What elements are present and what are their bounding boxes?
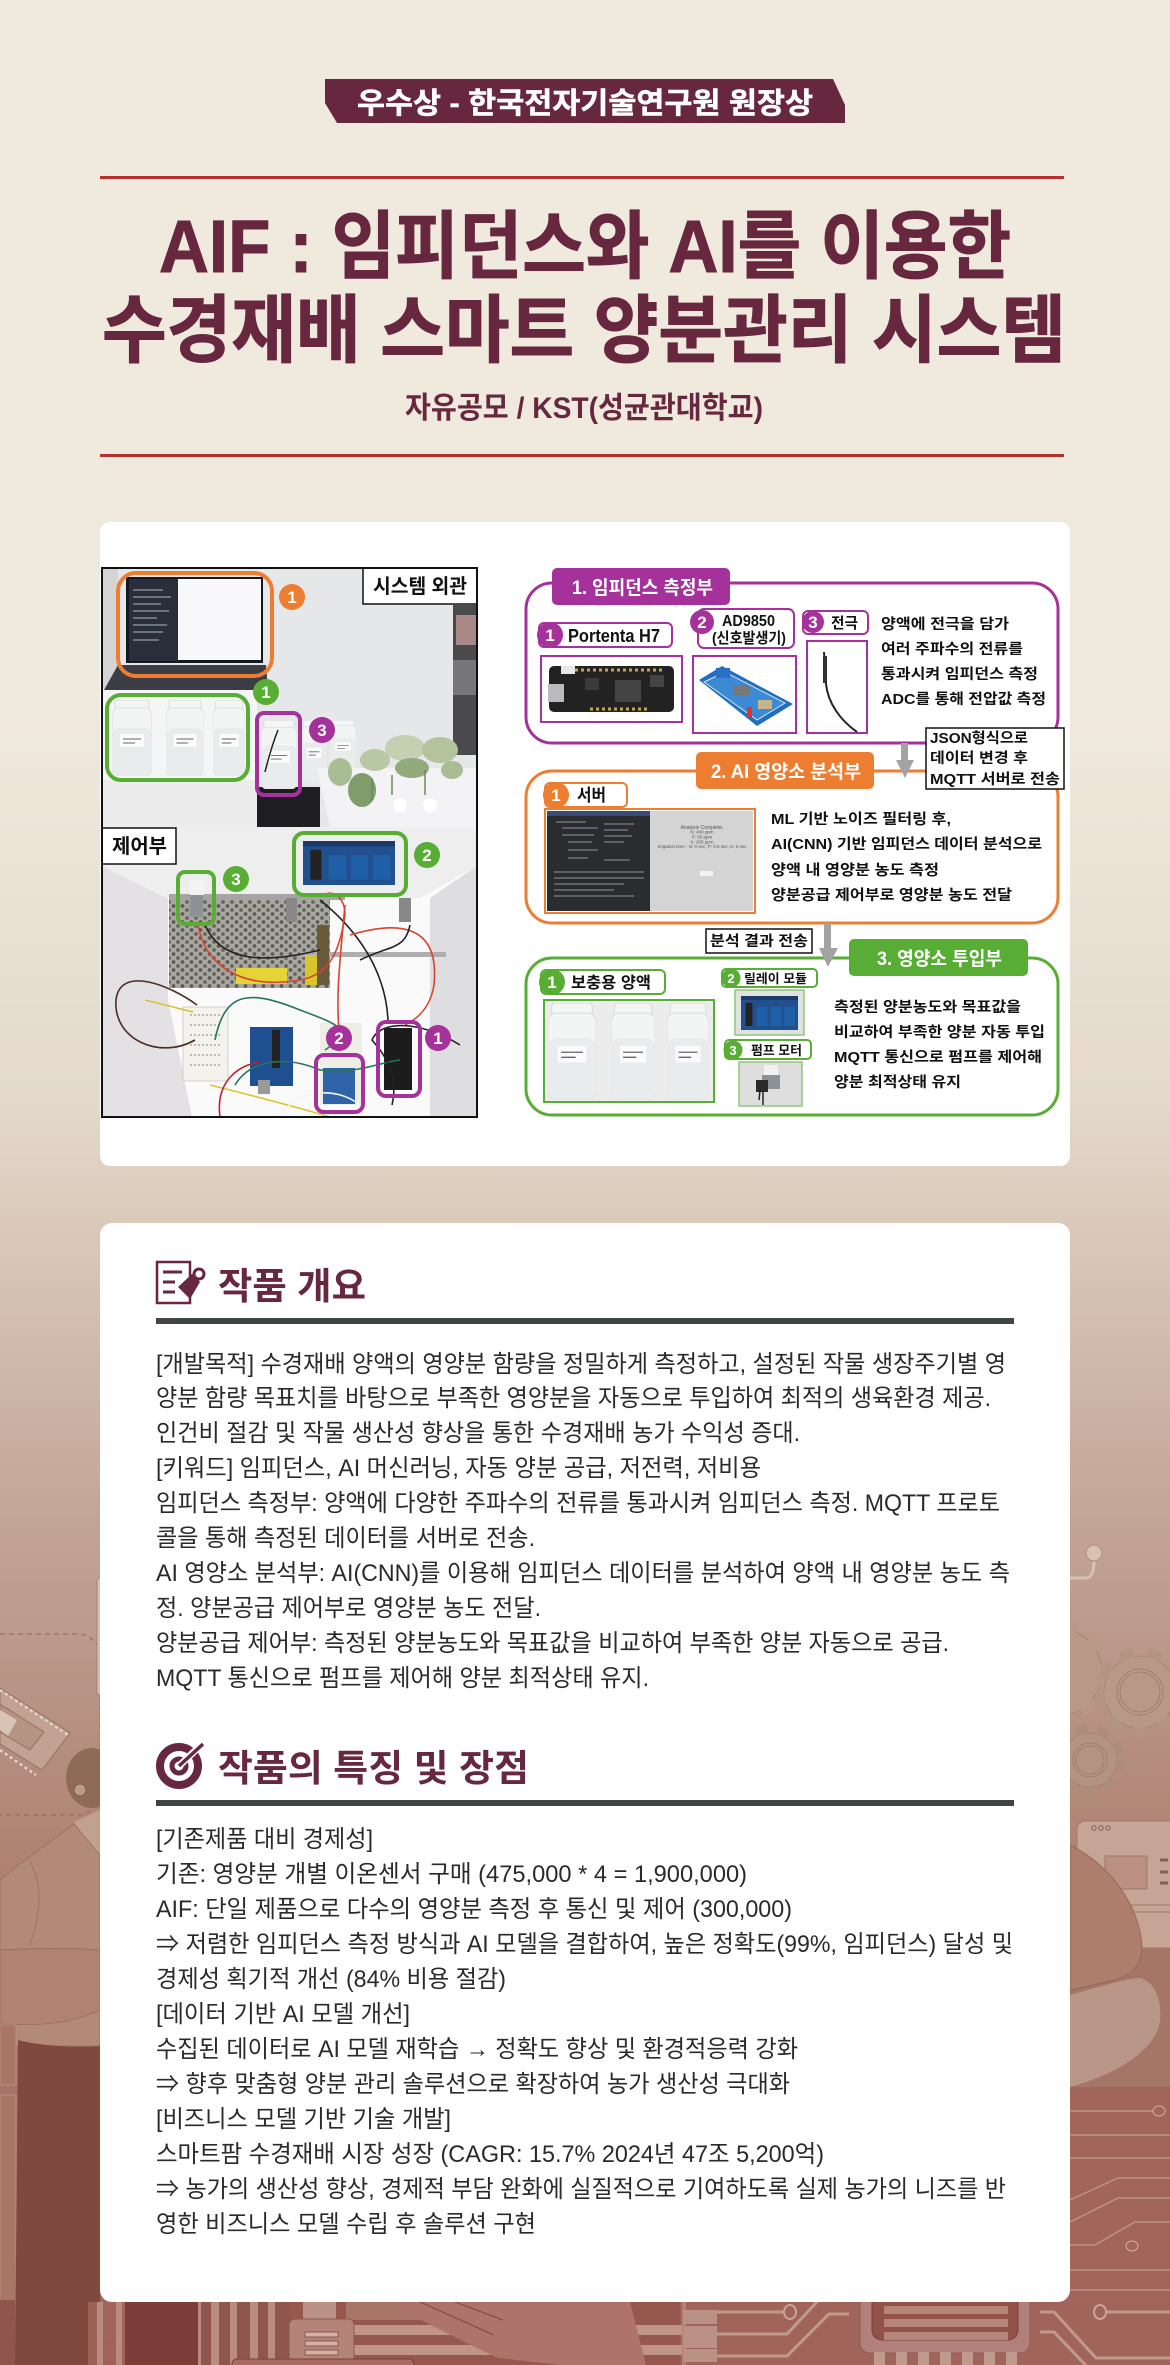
main title: 수경재배 스마트 양분관리 시스템 xyxy=(102,289,1066,372)
heading: impedance measurement: 1. 임피던스 측정부 xyxy=(572,577,713,599)
item: Portenta H7: Portenta H7 xyxy=(568,626,660,646)
item: Portenta H7: 1 xyxy=(545,626,555,645)
callout: JSON MQTT transfer: JSON형식으로 xyxy=(930,730,1028,747)
image: server screenshot: Analysis Complete. xyxy=(681,825,723,831)
item: AD9850: AD9850 xyxy=(722,613,775,630)
item: AD9850: (신호발생기) xyxy=(712,630,786,647)
text: features body: AIF: 단일 제품으로 다수의 영양분 측정 후 통신 및 제어 (300,000) xyxy=(156,1896,792,1923)
heading: impedance measurement xyxy=(552,568,730,605)
photo: system exterior: 1 xyxy=(287,588,297,607)
photo: control unit: 2 xyxy=(334,1029,344,1048)
item: server xyxy=(543,782,627,808)
text: impedance description xyxy=(881,616,1046,708)
item: relay module: 2 xyxy=(727,971,735,986)
text: overview body: [개발목적] 수경재배 양액의 영양분 함량을 정밀하게 측정하고, 설정된 작물 생장주기별 영 xyxy=(156,1351,1006,1378)
panel: 2. AI nutrient analysis xyxy=(526,752,1058,923)
text: analysis description xyxy=(771,811,1042,904)
callout: JSON MQTT transfer: MQTT 서버로 전송 xyxy=(930,771,1060,788)
item: pump motor: 3 xyxy=(729,1043,737,1058)
subtitle: organisation: 자유공모 / KST(성균관대학교) xyxy=(405,392,763,425)
image: server screenshot: P: 50 ppm xyxy=(692,834,713,840)
item: Portenta H7 xyxy=(537,622,682,722)
item: supplemental solution: 1 xyxy=(547,973,557,992)
photo: control unit: 1 xyxy=(433,1029,443,1048)
heading: project overview: 작품 개요 xyxy=(218,1266,366,1307)
text: overview body: 양분공급 제어부: 측정된 양분농도와 목표값을 비교하여 부족한 양분 자동으로 공급. xyxy=(156,1630,949,1657)
label: system exterior xyxy=(363,568,477,604)
panel: system diagram card xyxy=(100,522,1070,1166)
heading: nutrient injection: 3. 영양소 투입부 xyxy=(877,948,1002,970)
text: impedance description: 통과시켜 임피던스 측정 xyxy=(881,666,1038,683)
item: electrode: 전극 xyxy=(831,615,858,632)
image: server screenshot: Irrigation time - N: 0 sec, P: 0.5 sec, K: 0 sec xyxy=(657,844,747,849)
item: relay module xyxy=(722,968,817,1035)
item: server: 1 xyxy=(551,786,561,805)
text: injection description: MQTT 통신으로 펌프를 제어해 xyxy=(834,1049,1042,1066)
photo: system exterior: 3 xyxy=(317,721,327,740)
heading: AI nutrient analysis: 2. AI 영양소 분석부 xyxy=(711,761,861,783)
text: overview body: [키워드] 임피던스, AI 머신러닝, 자동 양분 공급, 저전력, 저비용 xyxy=(156,1455,761,1482)
callout: JSON MQTT transfer: 데이터 변경 후 xyxy=(930,750,1028,767)
text: features body: 영한 비즈니스 모델 수립 후 솔루션 구현 xyxy=(156,2211,536,2238)
heading: AI nutrient analysis xyxy=(696,752,874,789)
text: injection description: 비교하여 부족한 양분 자동 투입 xyxy=(834,1024,1045,1041)
arrow: analysis to injection xyxy=(819,923,838,967)
photo: control unit: 3 xyxy=(231,870,241,889)
main title: AIF : 임피던스와 AI를 이용한 xyxy=(159,205,1011,288)
label: system exterior: 시스템 외관 xyxy=(373,575,467,598)
photo: system exterior: 1 xyxy=(261,683,271,702)
right illustration: node, gears, browser window, arm and traces xyxy=(1011,1545,1170,2302)
callout: JSON MQTT transfer xyxy=(926,728,1064,789)
bottom right illustration: circuit chip and traces xyxy=(682,2289,1170,2365)
section: project overview xyxy=(156,1262,1014,1692)
text: features body: 기존: 영양분 개별 이온센서 구매 (475,000 * 4 = 1,900,000) xyxy=(156,1861,747,1888)
icon: target xyxy=(160,1744,203,1785)
item: relay module: 릴레이 모듈 xyxy=(744,971,807,986)
text: features body: ⇒ 농가의 생산성 향상, 경제적 부담 완화에 실질적으로 기여하도록 실제 농가의 니즈를 반 xyxy=(156,2176,1006,2203)
item: supplemental solution: 보충용 양액 xyxy=(571,974,651,992)
text: injection description: 양분 최적상태 유지 xyxy=(834,1074,961,1091)
text: features body: [비즈니스 모델 기반 기술 개발] xyxy=(156,2106,451,2133)
section: features and advantages xyxy=(156,1744,1014,2238)
text: features body xyxy=(156,1826,1013,2238)
callout: analysis result transfer xyxy=(706,929,812,953)
label: control unit xyxy=(102,828,176,864)
image: server screenshot: N: 400 ppm xyxy=(690,830,714,834)
icon: document with pin xyxy=(157,1262,204,1303)
arrow: measurement to analysis xyxy=(896,743,914,778)
text: overview body: MQTT 통신으로 펌프를 제어해 양분 최적상태 유지. xyxy=(156,1665,649,1692)
left illustration: dashed frame, film chip, person xyxy=(0,1578,122,2365)
callout: analysis result transfer: 분석 결과 전송 xyxy=(710,933,808,950)
text: features body: 수집된 데이터로 AI 모델 재학습 → 정확도 향상 및 환경적응력 강화 xyxy=(156,2036,798,2063)
text: overview body: 정. 양분공급 제어부로 영양분 농도 전달. xyxy=(156,1595,541,1622)
label: control unit: 제어부 xyxy=(112,835,167,858)
text: features body: 경제성 획기적 개선 (84% 비용 절감) xyxy=(156,1966,506,1993)
text: features body: [데이터 기반 AI 모델 개선] xyxy=(156,2001,410,2028)
text: overview body: 인건비 절감 및 작물 생산성 향상을 통한 수경재배 농가 수익성 증대. xyxy=(156,1420,800,1447)
item: AD9850: 2 xyxy=(697,613,707,632)
item: AD9850 xyxy=(690,609,796,733)
text: features body: ⇒ 저렴한 임피던스 측정 방식과 AI 모델을 결합하여, 높은 정확도(99%, 임피던스) 달성 및 xyxy=(156,1931,1013,1958)
photo: system exterior xyxy=(102,568,477,827)
text: analysis description: 양액 내 영양분 농도 측정 xyxy=(771,862,939,879)
heading: nutrient injection xyxy=(849,939,1028,976)
text: injection description: 측정된 양분농도와 목표값을 xyxy=(834,999,1021,1016)
text: features body: [기존제품 대비 경제성] xyxy=(156,1826,373,1853)
photo: control unit xyxy=(102,827,477,1117)
text: overview body xyxy=(156,1351,1010,1692)
text: impedance description: 여러 주파수의 전류를 xyxy=(881,641,1023,658)
text: overview body: AI 영양소 분석부: AI(CNN)를 이용해 임피던스 데이터를 분석하여 양액 내 영양분 농도 측 xyxy=(156,1560,1010,1587)
bottom centre illustration: striped wires, connector, body xyxy=(125,2300,684,2365)
panel: 3. nutrient injection xyxy=(526,939,1058,1115)
item: supplemental solution xyxy=(539,969,714,1102)
item: pump motor xyxy=(724,1040,811,1106)
item: electrode: 3 xyxy=(808,613,818,632)
item: pump motor: 펌프 모터 xyxy=(751,1043,802,1058)
heading: features and advantages: 작품의 특징 및 장점 xyxy=(218,1748,529,1789)
text: impedance description: 양액에 전극을 담가 xyxy=(881,616,1009,633)
text: injection description xyxy=(834,999,1045,1091)
panel: 1. impedance measurement xyxy=(526,568,1058,743)
text: overview body: 임피던스 측정부: 양액에 다양한 주파수의 전류를 통과시켜 임피던스 측정. MQTT 프로토 xyxy=(156,1490,1000,1517)
image: server screenshot: K: 200 ppm xyxy=(690,840,714,844)
text: features body: ⇒ 향후 맞춤형 양분 관리 솔루션으로 확장하여 농가 생산성 극대화 xyxy=(156,2071,790,2098)
text: analysis description: AI(CNN) 기반 임피던스 데이터 분석으로 xyxy=(771,836,1042,853)
award badge xyxy=(325,79,845,123)
text: features body: 스마트팜 수경재배 시장 성장 (CAGR: 15.7% 2024년 47조 5,200억) xyxy=(156,2141,824,2168)
main title xyxy=(102,205,1066,372)
award badge: 우수상 - 한국전자기술연구원 원장상 xyxy=(357,87,813,120)
text: analysis description: 양분공급 제어부로 영양분 농도 전달 xyxy=(771,887,1012,904)
item: server: 서버 xyxy=(577,786,606,805)
text: overview body: 양분 함량 목표치를 바탕으로 부족한 영양분을 자동으로 투입하여 최적의 생육환경 제공. xyxy=(156,1385,991,1412)
text: overview body: 콜을 통해 측정된 데이터를 서버로 전송. xyxy=(156,1525,535,1552)
panel: description card xyxy=(100,1223,1070,2302)
photo: control unit: 2 xyxy=(422,846,432,865)
text: impedance description: ADC를 통해 전압값 측정 xyxy=(881,691,1046,708)
image: server screenshot xyxy=(545,809,755,913)
text: analysis description: ML 기반 노이즈 필터링 후, xyxy=(771,811,951,828)
item: electrode xyxy=(802,611,868,733)
background illustration: technician, chip and circuit board xyxy=(0,1545,1170,2365)
